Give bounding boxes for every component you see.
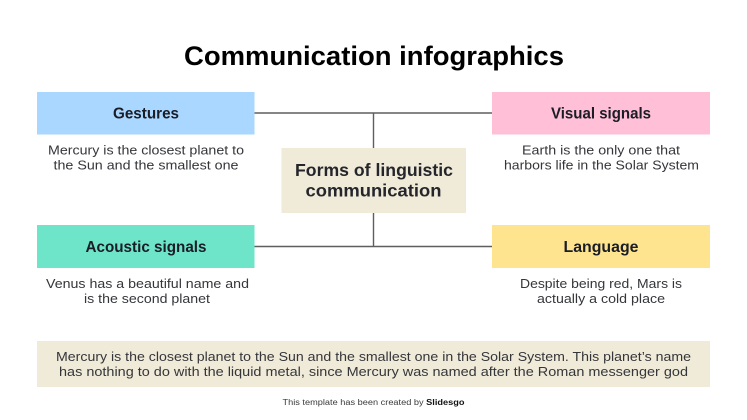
heading: acoustic signals: Acoustic signals [86, 239, 206, 256]
text: acoustic signals description [46, 276, 249, 306]
heading: gestures: Gestures [113, 106, 179, 122]
connector lines [254, 113, 492, 246]
panel: visual signals [492, 92, 710, 172]
heading: language: Language [564, 239, 639, 256]
text: bottom note: Mercury is the closest planet to the Sun and the smallest one in the Solar System. This planet’s name [56, 349, 691, 364]
heading: visual signals: Visual signals [551, 106, 651, 122]
text: visual signals description: harbors life in the Solar System [504, 158, 699, 172]
text: bottom note [56, 349, 691, 379]
heading: forms of linguistic communication [295, 160, 453, 200]
text: bottom note: has nothing to do with the liquid metal, since Mercury was named after the Roman messenger god [59, 364, 688, 379]
text: acoustic signals description: is the second planet [84, 291, 210, 306]
panel: language [492, 225, 710, 306]
panel: central topic [282, 148, 466, 213]
panel: gestures [37, 92, 254, 172]
text: gestures description: the Sun and the smallest one [54, 158, 239, 172]
panel: bottom note [37, 341, 710, 387]
title: Communication infographics [184, 41, 564, 71]
panel: acoustic signals [37, 225, 254, 306]
text: acoustic signals description: Venus has a beautiful name and [46, 276, 249, 291]
text: gestures description [48, 142, 244, 172]
heading: forms of linguistic communication: Forms of linguistic [295, 160, 453, 180]
heading: forms of linguistic communication: communication [306, 180, 442, 200]
text: language description: Despite being red, Mars is [520, 276, 683, 291]
credit line: This template has been created by Slidesgo [282, 398, 465, 407]
text: gestures description: Mercury is the closest planet to [48, 142, 244, 158]
text: language description: actually a cold place [537, 291, 665, 306]
text: visual signals description: Earth is the only one that [522, 142, 680, 158]
text: visual signals description [504, 142, 699, 172]
text: language description [520, 276, 683, 306]
